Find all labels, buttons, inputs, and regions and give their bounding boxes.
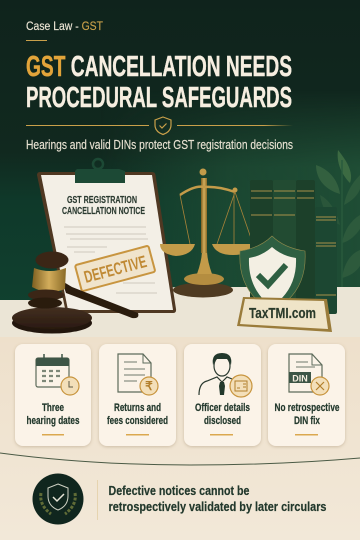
card label: fees considered — [107, 415, 168, 427]
card label: disclosed — [204, 415, 241, 427]
badge: shield with laurel — [32, 474, 84, 524]
notice heading — [62, 195, 145, 217]
card: no retrospective din fix — [268, 344, 345, 446]
kicker: Case Law - GST: Case Law - GST — [26, 21, 103, 33]
closing statement — [108, 483, 326, 514]
card label: No retrospective — [274, 402, 340, 414]
icon: calendar with clock — [36, 354, 79, 395]
placard: TaxTMI.com: TaxTMI.com — [249, 306, 316, 322]
card label: Returns and — [114, 402, 161, 414]
illustration: leaves — [316, 150, 360, 287]
lower panel background — [0, 337, 360, 540]
card label: hearing dates — [26, 415, 80, 427]
background: dark green wall — [0, 0, 360, 310]
header block — [26, 21, 293, 152]
card label — [107, 402, 168, 427]
divider with shield icon — [26, 117, 293, 134]
card label — [26, 402, 80, 427]
card: officer details disclosed — [184, 344, 261, 446]
icon: din document with cross: DIN — [292, 374, 308, 384]
card label: Officer details — [195, 402, 250, 414]
title — [26, 51, 292, 114]
notice heading: CANCELLATION NOTICE — [62, 206, 145, 217]
subtitle: Hearings and valid DINs protect GST registration decisions — [26, 138, 293, 152]
stamp: defective — [75, 246, 155, 291]
closing statement: Defective notices cannot be — [108, 483, 250, 498]
icon: document with rupee: ₹ — [145, 379, 153, 393]
card: returns and fees considered — [99, 344, 176, 446]
card label — [274, 402, 340, 427]
placard: TaxTMI.com — [237, 297, 332, 332]
illustration: shield with check — [240, 236, 305, 300]
stamp: defective: DEFECTIVE — [82, 252, 149, 287]
illustration: green books — [250, 180, 337, 314]
illustration: clipboard with notice — [37, 159, 176, 313]
card: three hearing dates — [15, 344, 91, 446]
illustration: gavel — [12, 252, 138, 334]
clipboard clip — [75, 159, 125, 183]
card label: Three — [42, 402, 64, 414]
illustration: scales of justice — [160, 168, 254, 298]
card label: DIN fix — [294, 415, 321, 427]
icon: officer with id badge — [199, 353, 252, 397]
table surface — [0, 287, 360, 337]
notice heading: GST REGISTRATION — [67, 195, 137, 206]
card label — [195, 402, 250, 427]
